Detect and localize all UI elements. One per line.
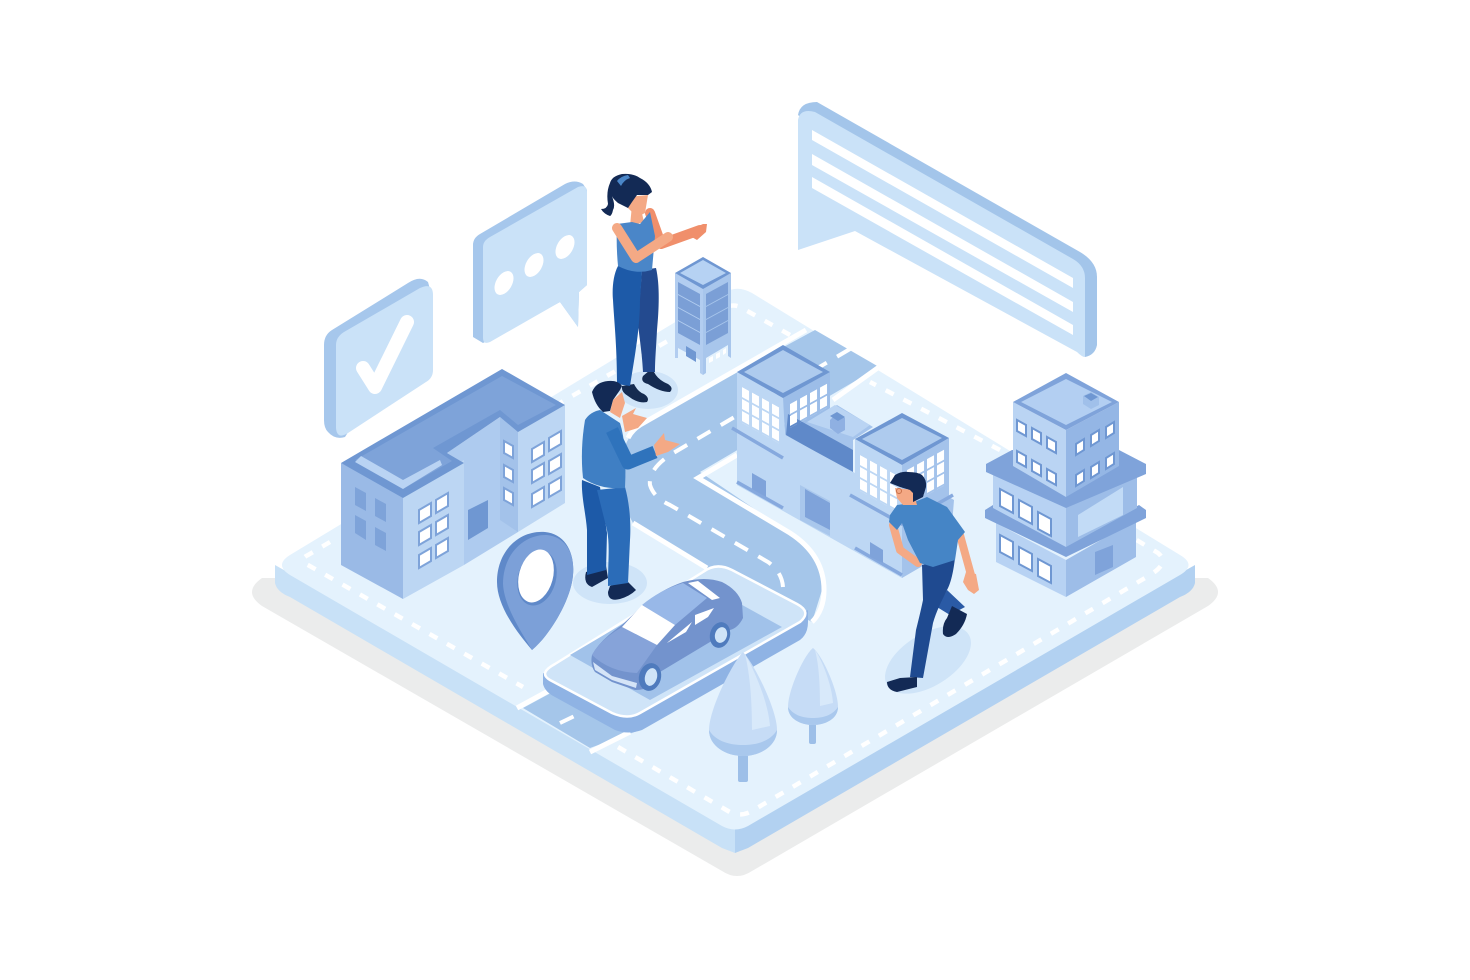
bubble with dots xyxy=(473,182,587,343)
road xyxy=(517,330,879,752)
speech bubble with text lines xyxy=(798,102,1097,357)
check bubble xyxy=(324,279,433,438)
map pin xyxy=(497,532,573,650)
platform base xyxy=(252,289,1218,876)
tree large xyxy=(709,652,777,782)
man walking xyxy=(874,472,982,707)
man with sweater xyxy=(573,381,680,604)
right building xyxy=(985,373,1146,597)
left office building xyxy=(341,369,565,599)
woman xyxy=(601,174,707,409)
car xyxy=(591,579,743,693)
tree small xyxy=(788,648,838,744)
smartphone with car xyxy=(543,566,808,732)
small tower building xyxy=(675,257,731,375)
central city building xyxy=(732,345,954,578)
